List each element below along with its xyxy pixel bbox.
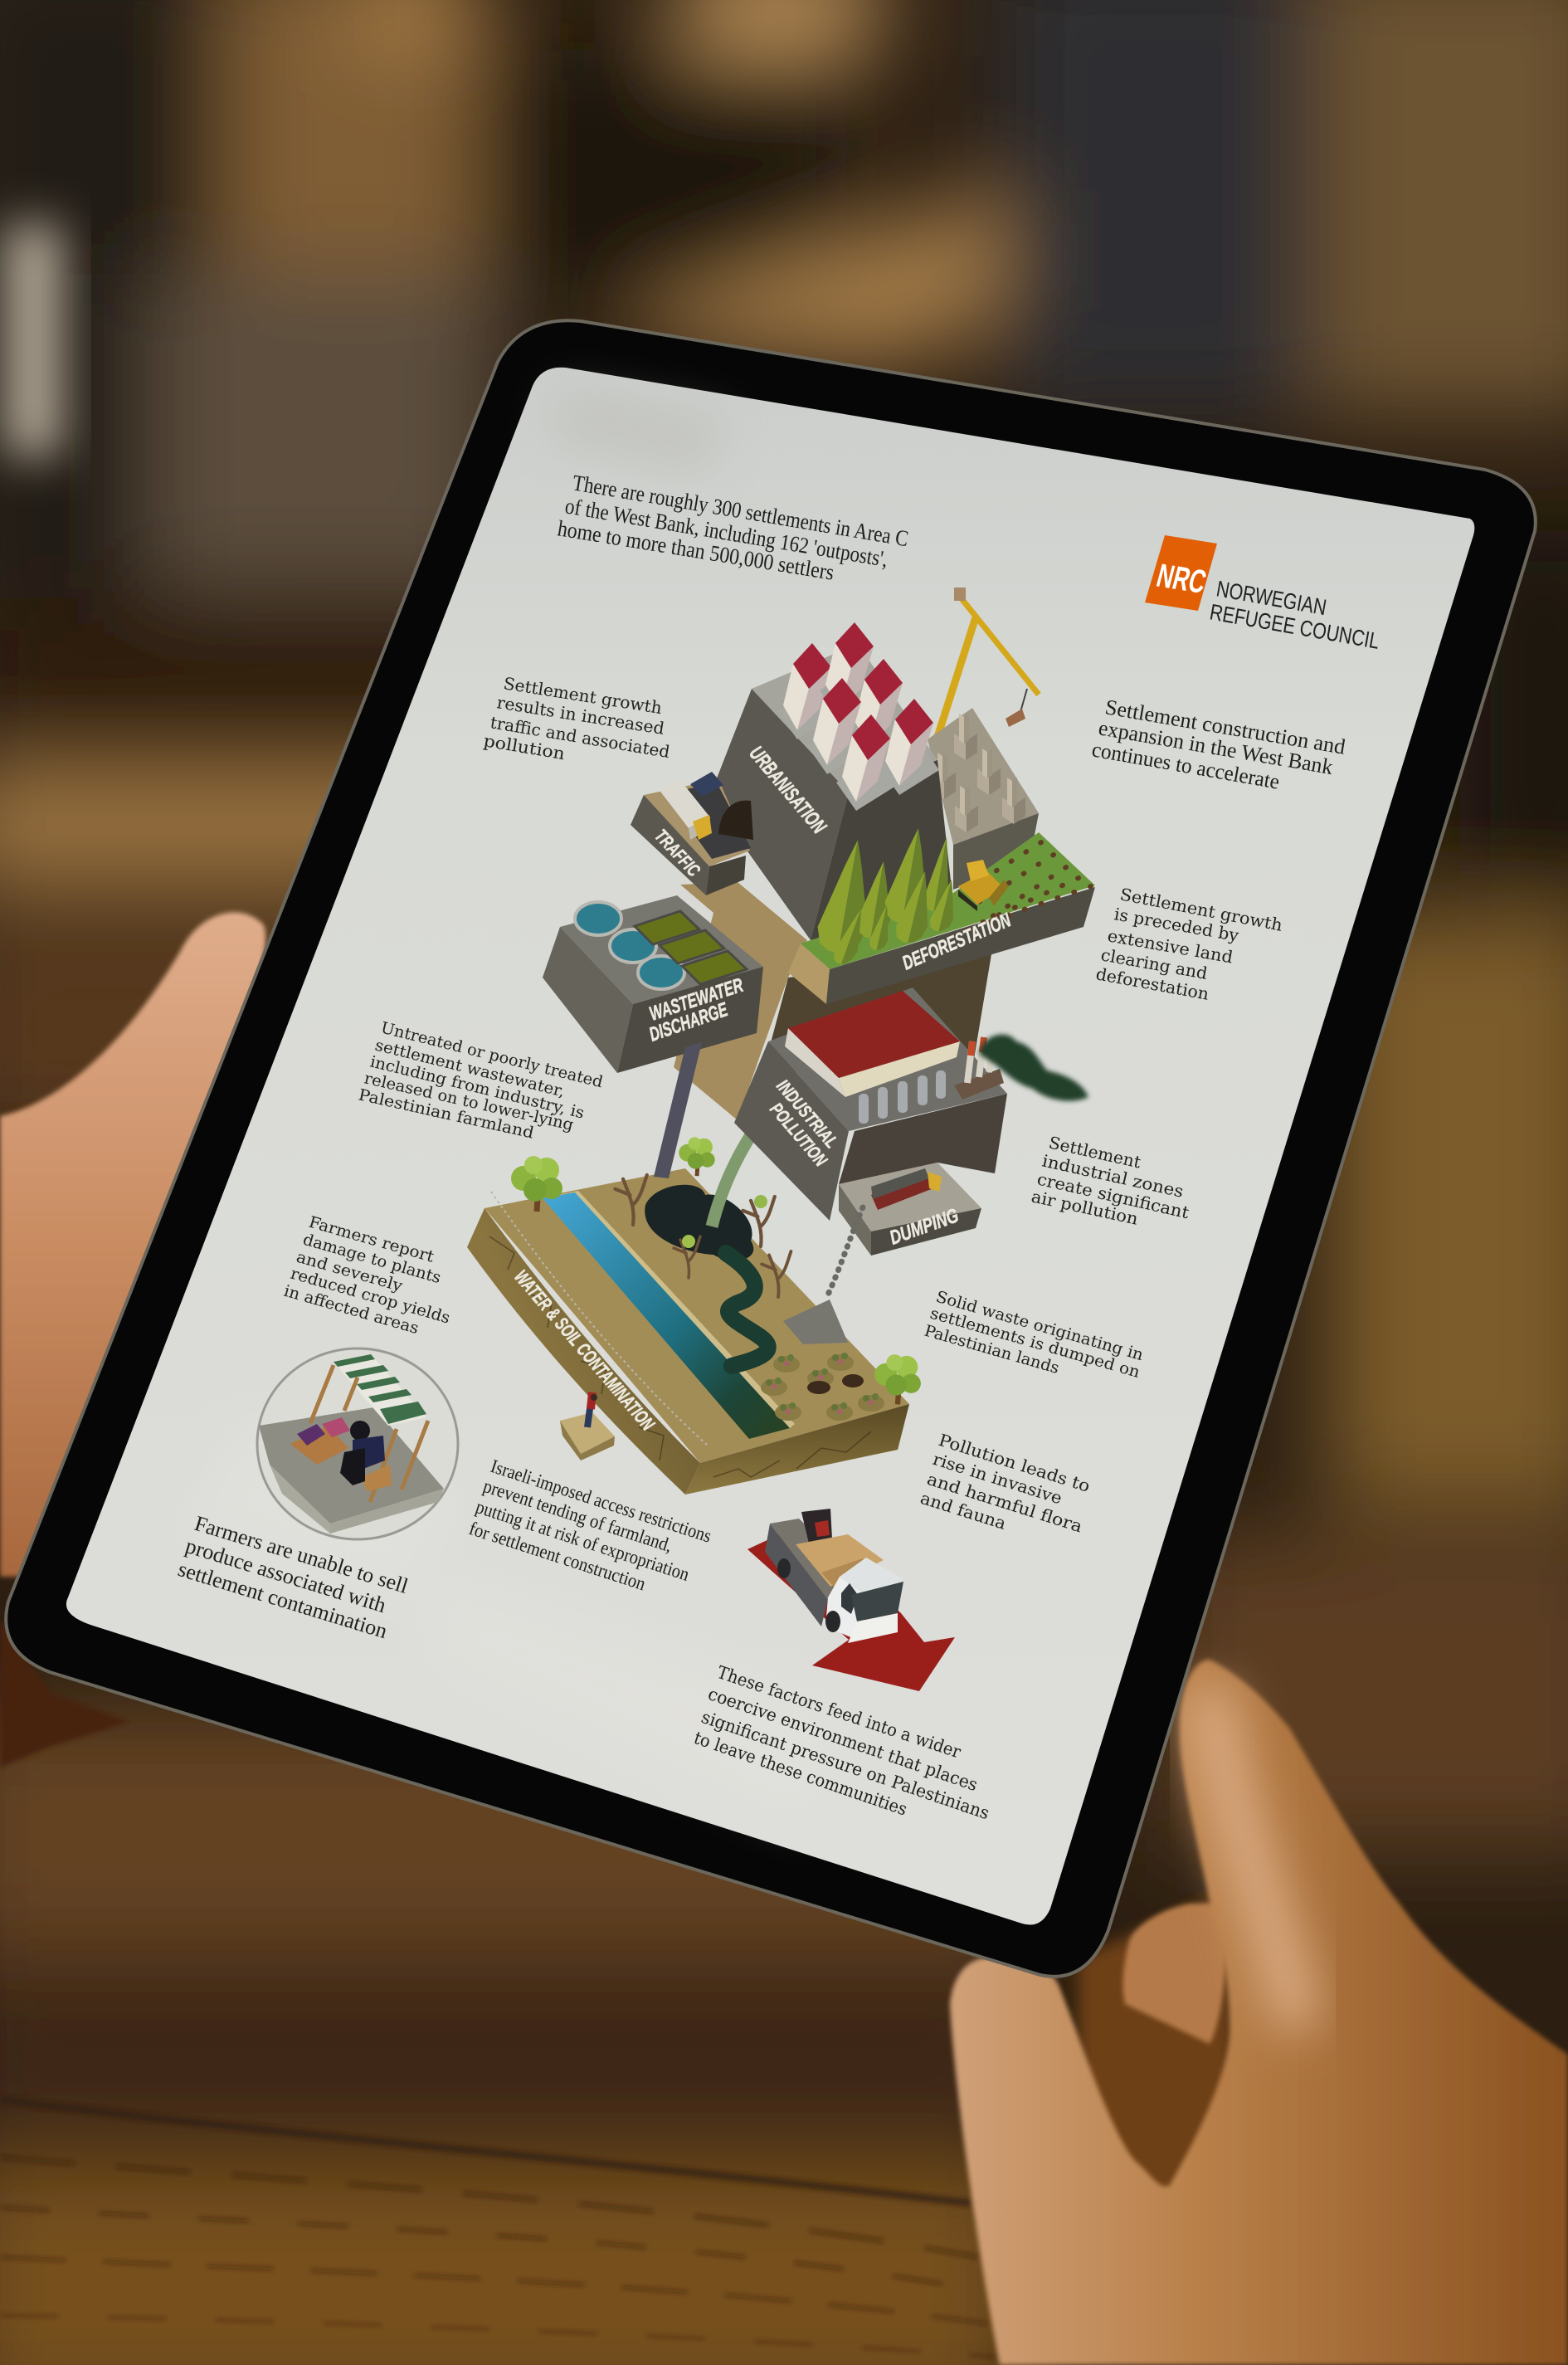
industrial block: INDUSTRIAL (772, 1075, 842, 1152)
text: traffic: Settlement growth (502, 673, 664, 718)
text: wastewater: including from industry, is (368, 1052, 586, 1123)
text: traffic (482, 673, 671, 763)
industrial block (734, 987, 1088, 1221)
text: coercive environment: significant pressure on Palestinians (699, 1707, 992, 1823)
text: crop damage: reduced crop yields (289, 1265, 452, 1328)
ground slab: water and soil contamination (467, 1042, 921, 1495)
person on plinth (560, 1392, 615, 1460)
deforestation platform: DEFORESTATION (899, 909, 1015, 975)
urbanisation block: URBANISATION (744, 742, 831, 838)
text: settlements overview: There are roughly 300 settlements in Area C (571, 470, 910, 551)
river (543, 1191, 795, 1439)
text: solid waste: settlements is dumped on (928, 1304, 1142, 1382)
seated farmer (340, 1421, 385, 1485)
bulldozer (958, 860, 1009, 911)
text: construction: Settlement construction and (1103, 695, 1347, 759)
industrial block: POLLUTION (766, 1099, 831, 1171)
text: wastewater: settlement wastewater, (373, 1036, 567, 1101)
tablet body (6, 320, 1536, 1977)
text: traffic: results in increased (495, 692, 666, 739)
text: access restrictions: putting it at risk of expropriation (473, 1496, 692, 1585)
text: unable to sell: settlement contamination (175, 1557, 390, 1643)
gravel pile (783, 1300, 848, 1344)
market awning (310, 1354, 428, 1502)
text: industrial air pollution: create significant (1035, 1168, 1191, 1222)
treatment ponds (635, 911, 747, 984)
lorry (658, 772, 723, 840)
falling gravel (828, 1207, 863, 1295)
text: access restrictions (466, 1456, 714, 1594)
urbanisation block (709, 622, 953, 940)
truck with belongings (765, 1509, 903, 1643)
screen texture (183, 390, 830, 1826)
text: invasive flora and fauna: and harmful flora (924, 1469, 1085, 1536)
text: construction: continues to accelerate (1090, 737, 1282, 794)
right hand holding tablet (950, 1660, 1568, 2365)
text: deforestation: is preceded by (1113, 904, 1241, 945)
text: access restrictions: Israeli-imposed access restrictions (488, 1456, 714, 1547)
chimneys (954, 1037, 1004, 1100)
text: invasive flora and fauna: and fauna (918, 1488, 1009, 1534)
text: construction: expansion in the West Bank (1097, 715, 1335, 779)
crane (937, 588, 1039, 737)
soil cracks (489, 1236, 871, 1477)
text: coercive environment: These factors feed into a wider (714, 1662, 964, 1763)
text: deforestation: deforestation (1094, 963, 1210, 1004)
silos (859, 1070, 946, 1124)
text: wastewater: Untreated or poorly treated (379, 1019, 605, 1091)
industrial outflow pipe (712, 1135, 751, 1226)
text: deforestation: Settlement growth (1118, 884, 1284, 935)
text: deforestation (1094, 884, 1284, 1004)
cypress trees (813, 828, 963, 964)
text: unable to sell (175, 1511, 411, 1643)
text: crop damage: in affected areas (282, 1282, 421, 1338)
wastewater block (543, 895, 763, 1073)
text: invasive flora and fauna: rise in invasive (930, 1449, 1064, 1508)
text: deforestation: extensive land (1106, 925, 1234, 968)
text: crop damage: damage to plants (301, 1231, 443, 1287)
text: traffic: pollution (482, 730, 567, 763)
text: coercive environment: coercive environment that places (705, 1684, 981, 1795)
logo: Norwegian Refugee Council: NRC (1153, 558, 1210, 601)
central tan column (674, 882, 991, 1120)
trees on farmland (511, 1137, 921, 1404)
market crates (290, 1417, 392, 1491)
factory (785, 991, 960, 1097)
tablet screen (66, 368, 1474, 1925)
text: deforestation: clearing and (1099, 944, 1210, 983)
deforestation platform (788, 828, 1095, 1004)
text: construction (1090, 695, 1347, 794)
settling tanks (575, 902, 684, 989)
text: industrial air pollution: industrial zones (1040, 1150, 1186, 1202)
text: solid waste: Solid waste originating in (934, 1288, 1146, 1364)
traffic block: TRAFFIC (650, 825, 705, 881)
text: invasive flora and fauna (918, 1430, 1093, 1536)
text: crop damage: Farmers report (307, 1213, 436, 1266)
text: settlements overview (556, 470, 910, 585)
text: settlements overview: of the West Bank, including 162 'outposts', (563, 493, 890, 572)
fence (491, 1192, 707, 1445)
text: crop damage (282, 1213, 452, 1338)
dumping block: DUMPING (887, 1204, 962, 1250)
dumping block (828, 1163, 981, 1295)
left hand holding tablet (0, 912, 265, 1768)
text: access restrictions: prevent tending of farmland, (480, 1475, 675, 1556)
text: access restrictions: for settlement construction (466, 1518, 649, 1594)
ground slab: water and soil contamination: WATER & SOIL CONTAMINATION (510, 1265, 659, 1435)
text: solid waste: Palestinian lands (923, 1322, 1061, 1378)
text: wastewater: Palestinian farmland (357, 1085, 536, 1143)
text: unable to sell: produce associated with (183, 1534, 389, 1617)
text: coercive environment: to leave these communities (691, 1728, 909, 1820)
text: industrial air pollution: air pollution (1030, 1186, 1140, 1229)
text: coercive environment (691, 1662, 992, 1823)
market scene in circle (257, 1348, 458, 1539)
text: traffic: traffic and associated (489, 712, 671, 762)
text: settlements overview: home to more than 500,000 settlers (556, 515, 836, 585)
tree stumps (958, 842, 1091, 934)
logo: Norwegian Refugee Council: NORWEGIAN (1215, 576, 1328, 620)
text: crop damage: and severely (295, 1248, 405, 1295)
text: invasive flora and fauna: Pollution leads to (936, 1430, 1093, 1496)
houses (777, 622, 939, 811)
concrete foundations block (928, 708, 1039, 890)
text: industrial air pollution (1030, 1132, 1191, 1229)
smoke (979, 1035, 1088, 1101)
wastewater block: DISCHARGE (646, 998, 731, 1046)
red arrow (747, 1523, 955, 1691)
dump truck (871, 1168, 942, 1210)
wastewater pipe (654, 1042, 702, 1178)
text: wastewater: released on to lower-lying (363, 1069, 575, 1134)
logo: Norwegian Refugee Council (1145, 535, 1381, 654)
wastewater block: WASTEWATER (647, 974, 747, 1026)
text: unable to sell: Farmers are unable to sell (192, 1511, 411, 1598)
text: wastewater (357, 1019, 605, 1143)
logo: Norwegian Refugee Council: REFUGEE COUNCIL (1208, 599, 1381, 654)
polluted pool and stream (645, 1185, 768, 1366)
invasive plants and animals (761, 1353, 884, 1421)
traffic block (631, 772, 753, 895)
text: industrial air pollution: Settlement (1047, 1132, 1142, 1173)
